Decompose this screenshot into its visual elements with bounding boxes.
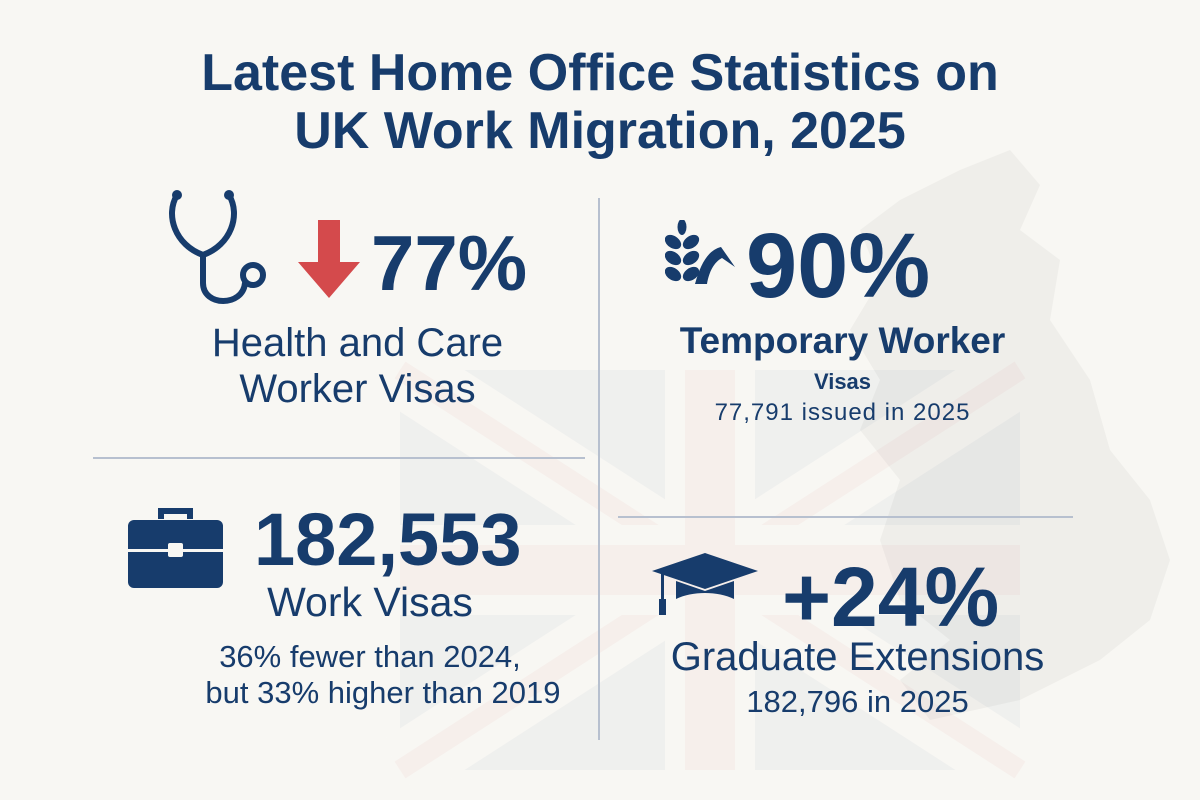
stat 77%: 77% bbox=[371, 219, 527, 307]
detail: but 33% higher than 2019 bbox=[205, 675, 560, 710]
detail: 77,791 issued in 2025 bbox=[715, 399, 970, 426]
icon: stethoscope bbox=[169, 190, 266, 304]
label: Graduate Extensions bbox=[671, 635, 1044, 679]
sub label: Visas bbox=[814, 369, 871, 394]
stat 90%: 90% bbox=[746, 215, 930, 317]
title: UK Work Migration, 2025 bbox=[294, 102, 906, 160]
icon: briefcase bbox=[128, 508, 223, 588]
stat 182,553: 182,553 bbox=[254, 498, 522, 581]
panel: work visas bbox=[128, 498, 560, 710]
panel: health and care bbox=[169, 190, 527, 411]
icon: graduation cap bbox=[652, 553, 758, 615]
icon: red down arrow bbox=[298, 220, 360, 298]
label: Worker Visas bbox=[239, 367, 476, 411]
title: Latest Home Office Statistics on bbox=[201, 44, 999, 102]
label: Temporary Worker bbox=[680, 320, 1005, 361]
label: Health and Care bbox=[212, 321, 503, 365]
detail bbox=[205, 639, 560, 710]
title bbox=[201, 44, 999, 160]
detail: 36% fewer than 2024, bbox=[219, 639, 521, 674]
horizontal divider left bbox=[93, 457, 585, 459]
panel: temporary worker bbox=[665, 215, 1005, 426]
stat +24%: +24% bbox=[782, 550, 999, 644]
detail: 182,796 in 2025 bbox=[746, 684, 969, 719]
horizontal divider right bbox=[618, 516, 1073, 518]
vertical divider bbox=[598, 198, 600, 740]
panel: graduate extensions bbox=[652, 550, 1044, 719]
icon: wheat bbox=[665, 220, 735, 284]
label: Work Visas bbox=[267, 579, 473, 625]
label bbox=[212, 321, 503, 411]
